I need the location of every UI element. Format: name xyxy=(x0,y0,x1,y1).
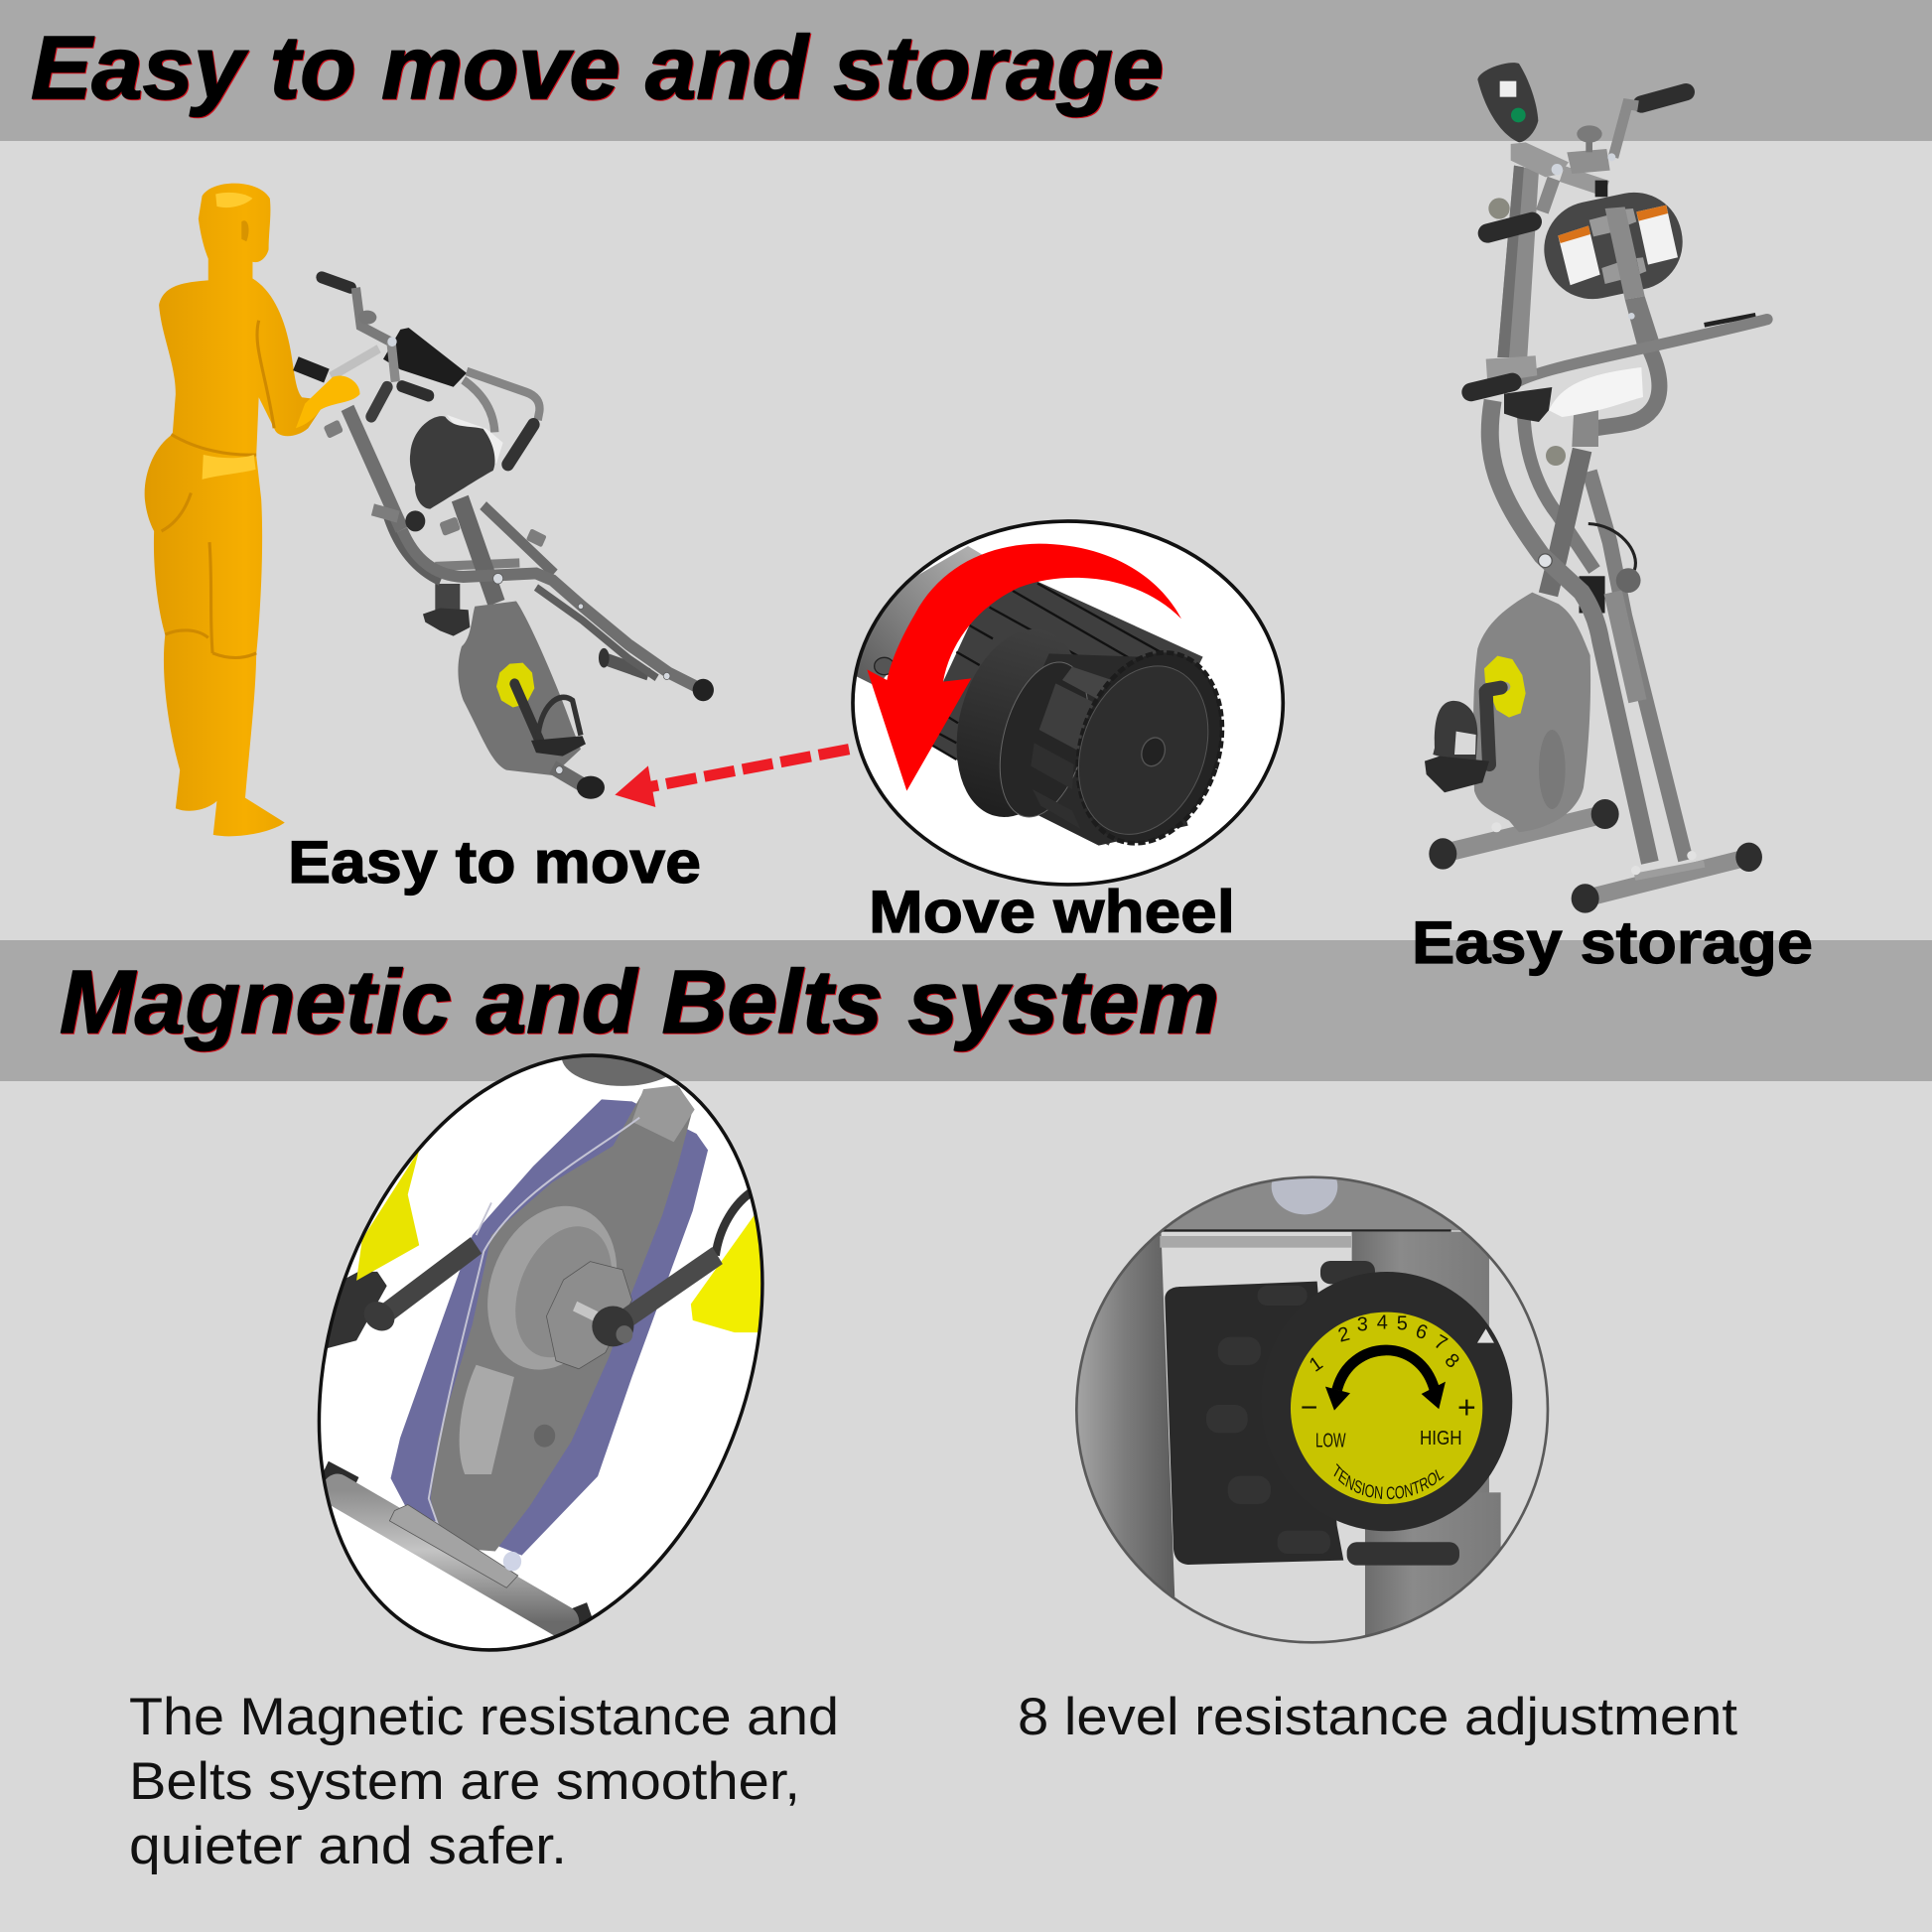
pedal xyxy=(531,736,586,757)
text block: magnetic resistance description: Belts system are smoother, xyxy=(129,1752,800,1811)
rear grip xyxy=(296,363,327,376)
lower body and feet xyxy=(1425,593,1762,913)
side grip xyxy=(508,425,533,465)
housing xyxy=(1473,593,1590,832)
upright shade xyxy=(1497,166,1524,357)
callout: magnetic and belt internals xyxy=(318,1053,764,1652)
yellow flywheel cap xyxy=(496,663,534,708)
pad strut xyxy=(1605,207,1645,300)
crank hub left xyxy=(359,1296,399,1336)
yellow pedal left xyxy=(356,1150,419,1281)
callout white fill xyxy=(853,521,1283,885)
bolt xyxy=(1272,1159,1337,1214)
seat brace xyxy=(483,505,554,573)
black bracket xyxy=(1165,1282,1343,1565)
flywheel disc xyxy=(487,1205,618,1370)
yellow pedal right xyxy=(691,1215,760,1332)
white seat rear xyxy=(447,415,503,464)
crank hub right cap xyxy=(616,1325,632,1343)
dial numbers: 6 xyxy=(1413,1320,1431,1344)
back pad xyxy=(1535,184,1692,308)
callout outline xyxy=(1076,1177,1548,1642)
bolt xyxy=(534,1425,555,1448)
foot nuts xyxy=(1491,822,1697,875)
knurled ribs xyxy=(1062,667,1111,699)
clamp knob xyxy=(1577,125,1602,143)
illustration: folded upright bike xyxy=(1425,63,1767,913)
foot bar tube xyxy=(338,1490,564,1622)
text block: magnetic resistance description: quieter and safer. xyxy=(129,1817,567,1875)
clamp bolt xyxy=(387,337,397,346)
bar grip xyxy=(1471,382,1512,392)
text block: magnetic resistance description xyxy=(129,1688,839,1875)
main tube xyxy=(1490,400,1650,863)
crank hub right xyxy=(592,1307,633,1346)
right pedal strap xyxy=(716,1190,754,1256)
crank arm right xyxy=(615,1256,718,1326)
top bar xyxy=(1511,142,1569,177)
label: easy storage: Easy storage xyxy=(1412,909,1813,976)
rear column xyxy=(1589,472,1686,860)
seat post knob xyxy=(1546,446,1566,466)
console screen xyxy=(1500,81,1516,97)
illustration: tilted exercise bike xyxy=(322,277,714,799)
grip angled xyxy=(371,387,387,417)
high label: HIGH xyxy=(1420,1427,1462,1449)
far pedal xyxy=(423,609,470,636)
low label: LOW xyxy=(1315,1429,1346,1451)
right tube upper xyxy=(1352,1232,1489,1496)
axle screw xyxy=(1141,737,1166,766)
collar to wheel fill xyxy=(1038,653,1188,846)
roller grooves xyxy=(928,584,1164,759)
top bar line xyxy=(1160,1229,1451,1232)
roller bolt xyxy=(875,657,895,675)
dial numbers: 1 xyxy=(1306,1352,1327,1377)
warning label right xyxy=(1636,206,1678,265)
front foot cap xyxy=(577,776,605,799)
rear foot bar xyxy=(1586,857,1749,898)
back pad xyxy=(383,328,467,387)
ear xyxy=(241,220,249,241)
left pedal strap xyxy=(326,1272,387,1348)
grip arm xyxy=(1613,104,1638,157)
text block: resistance adjustment: 8 level resistance adjustment xyxy=(1018,1688,1737,1746)
front foot bar xyxy=(1442,814,1605,854)
pedal strap xyxy=(538,697,581,741)
adjustment sleeve xyxy=(1613,592,1637,701)
wheel collar xyxy=(957,629,1071,817)
inner plate xyxy=(431,1087,693,1551)
callout: tension control dial xyxy=(1075,1175,1549,1644)
front foot caps xyxy=(1429,838,1456,870)
front foot bar xyxy=(553,767,583,784)
minus sign: − xyxy=(1301,1391,1317,1424)
warning label right header xyxy=(1636,206,1668,221)
title: easy to move and storage: Easy to move and storage xyxy=(31,19,1164,118)
top grip xyxy=(322,277,350,288)
text block: magnetic resistance description: The Magnetic resistance and xyxy=(129,1688,839,1746)
strut bolt xyxy=(1628,313,1635,320)
warning label left header xyxy=(1558,225,1590,243)
crank xyxy=(1486,688,1501,764)
clamp xyxy=(1567,149,1610,174)
dial face xyxy=(1291,1312,1482,1504)
seat column xyxy=(1548,450,1583,595)
black block xyxy=(1595,181,1607,197)
bracket fins xyxy=(1206,1261,1459,1566)
rear foot end xyxy=(599,648,610,668)
frame bolt xyxy=(1539,554,1552,568)
wheel rim xyxy=(1075,650,1225,846)
rear foot plate xyxy=(1635,864,1705,877)
yellow flywheel cap xyxy=(1484,656,1526,718)
header band: easy to move and storage xyxy=(0,0,1932,141)
callout outline xyxy=(853,521,1283,885)
dial numbers xyxy=(1306,1311,1463,1377)
lower arm xyxy=(1562,174,1606,189)
roller left end xyxy=(851,546,985,687)
white seat xyxy=(1549,367,1643,417)
seat post head xyxy=(1572,410,1598,447)
plus sign: + xyxy=(1457,1389,1476,1425)
knurled knobs xyxy=(324,419,547,547)
dial numbers: 8 xyxy=(1441,1349,1463,1373)
seat post xyxy=(460,498,496,603)
axle xyxy=(1501,682,1510,691)
warning label left xyxy=(1558,225,1600,285)
curved handlebar xyxy=(464,371,539,432)
lower strut xyxy=(1625,296,1660,349)
crank arm left xyxy=(379,1245,477,1318)
knob xyxy=(1261,1272,1512,1531)
second tube xyxy=(1524,407,1594,570)
housing xyxy=(458,602,581,775)
dark knob xyxy=(405,510,425,531)
axle xyxy=(575,1307,600,1318)
illustration: person in yellow xyxy=(145,184,359,836)
pulley octagon xyxy=(546,1262,632,1369)
wheel face xyxy=(1078,665,1209,835)
back cross tube xyxy=(435,563,519,566)
clamp block xyxy=(1486,355,1537,384)
rear foot cap xyxy=(693,679,714,701)
crossbar xyxy=(331,348,379,376)
upper frame tube xyxy=(347,408,402,530)
roller body xyxy=(926,579,1203,846)
top bar xyxy=(1072,1172,1552,1230)
waist highlight xyxy=(203,455,256,480)
dial arc arrow xyxy=(1325,1350,1446,1411)
crossbar tab xyxy=(1705,315,1755,325)
rear foot caps xyxy=(1572,884,1599,913)
handle bracket xyxy=(355,288,394,344)
pedal strap xyxy=(1433,701,1477,761)
callout outline xyxy=(238,983,844,1723)
second ring xyxy=(999,661,1088,818)
blue translucent cover xyxy=(391,1099,708,1556)
bracket plates xyxy=(1589,208,1646,284)
knurled knob xyxy=(1488,198,1510,219)
right tube lower xyxy=(1365,1492,1501,1648)
label: easy to move: Easy to move xyxy=(288,829,701,896)
dark bracket xyxy=(1579,576,1605,613)
middle frame tubes xyxy=(1490,400,1686,863)
dial numbers: 4 xyxy=(1377,1311,1388,1333)
head highlight xyxy=(215,193,252,207)
left grip xyxy=(1487,221,1532,233)
base nut xyxy=(503,1552,521,1571)
crank xyxy=(514,684,539,741)
main frame tube xyxy=(402,530,702,689)
label: move wheel: Move wheel xyxy=(869,879,1235,945)
header band: magnetic and belts system xyxy=(0,940,1932,1081)
frame bolts xyxy=(493,573,670,774)
red curved arrow xyxy=(867,544,1181,791)
pedal xyxy=(1425,757,1489,792)
title: magnetic and belts system: Magnetic and Belts system xyxy=(60,953,1219,1052)
dial numbers: 3 xyxy=(1357,1314,1368,1336)
foot bar caps xyxy=(325,1470,590,1624)
callout white fill xyxy=(238,983,844,1723)
left upright xyxy=(1497,166,1539,357)
dial numbers: 2 xyxy=(1335,1323,1352,1347)
body shading xyxy=(162,321,274,657)
pointer triangle xyxy=(1477,1328,1494,1343)
housing outline lines xyxy=(429,1118,639,1547)
callout: move wheel circle xyxy=(851,521,1283,885)
hand xyxy=(296,376,359,428)
flywheel inner xyxy=(515,1226,612,1358)
console button xyxy=(1511,108,1526,122)
housing bulge xyxy=(1539,730,1566,809)
pedal stem xyxy=(435,584,460,610)
foot bar plate xyxy=(389,1505,518,1587)
tension control label: TENSION CONTROL xyxy=(1334,1463,1444,1499)
dial numbers: 5 xyxy=(1397,1313,1408,1335)
belt mechanism xyxy=(460,1365,514,1474)
cable xyxy=(1588,524,1635,570)
adjustment knob xyxy=(1616,568,1641,593)
seat back curve xyxy=(1586,343,1659,430)
inner strip xyxy=(1160,1236,1351,1248)
grip lower xyxy=(402,386,429,396)
bracket strip xyxy=(391,342,395,382)
pedal gap xyxy=(1454,732,1476,755)
dial numbers: 7 xyxy=(1431,1330,1450,1355)
top grip xyxy=(1641,92,1686,104)
rear foot bar xyxy=(604,658,648,674)
brace xyxy=(1542,179,1554,211)
console xyxy=(1477,63,1538,142)
silhouette xyxy=(145,184,327,836)
clamp stem xyxy=(1586,137,1592,152)
dashed red arrow xyxy=(615,750,849,807)
upper frame and handlebar xyxy=(1471,63,1767,447)
seat xyxy=(410,416,494,509)
top strut xyxy=(632,1085,695,1142)
lower frame tube xyxy=(387,517,657,678)
bolts xyxy=(1552,164,1563,175)
crossbar xyxy=(1514,320,1767,384)
handle knob xyxy=(358,311,376,325)
left upright xyxy=(1072,1228,1174,1598)
seat underside xyxy=(562,1056,665,1086)
seat underside xyxy=(1504,387,1552,422)
